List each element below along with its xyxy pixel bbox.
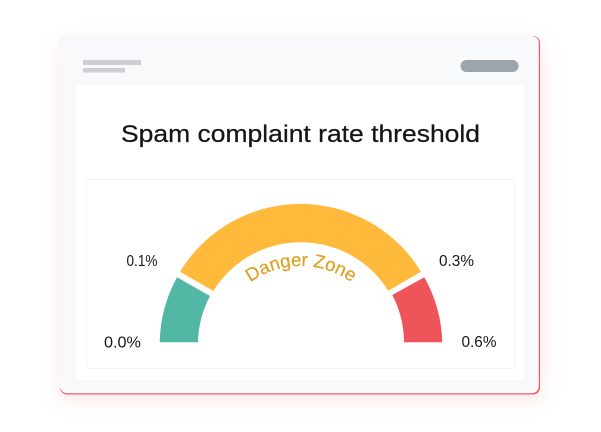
label: 0.0%: 0.0% [104, 334, 141, 352]
danger zone label: Danger Zone [244, 254, 355, 282]
header lines [83, 60, 141, 72]
card shadow [60, 42, 542, 400]
gauge segment: green [160, 277, 210, 342]
gauge segment: red [392, 277, 442, 342]
label: 0.1%: 0.1% [126, 253, 158, 270]
header button [460, 60, 518, 72]
panel: content area [76, 85, 524, 380]
panel: browser window [60, 36, 540, 394]
label: 0.3%: 0.3% [439, 253, 474, 270]
gauge segment: yellow danger zone [180, 204, 421, 291]
title: Spam complaint rate threshold [121, 121, 480, 148]
panel: gauge chart [86, 179, 515, 369]
label: 0.6%: 0.6% [462, 334, 497, 351]
